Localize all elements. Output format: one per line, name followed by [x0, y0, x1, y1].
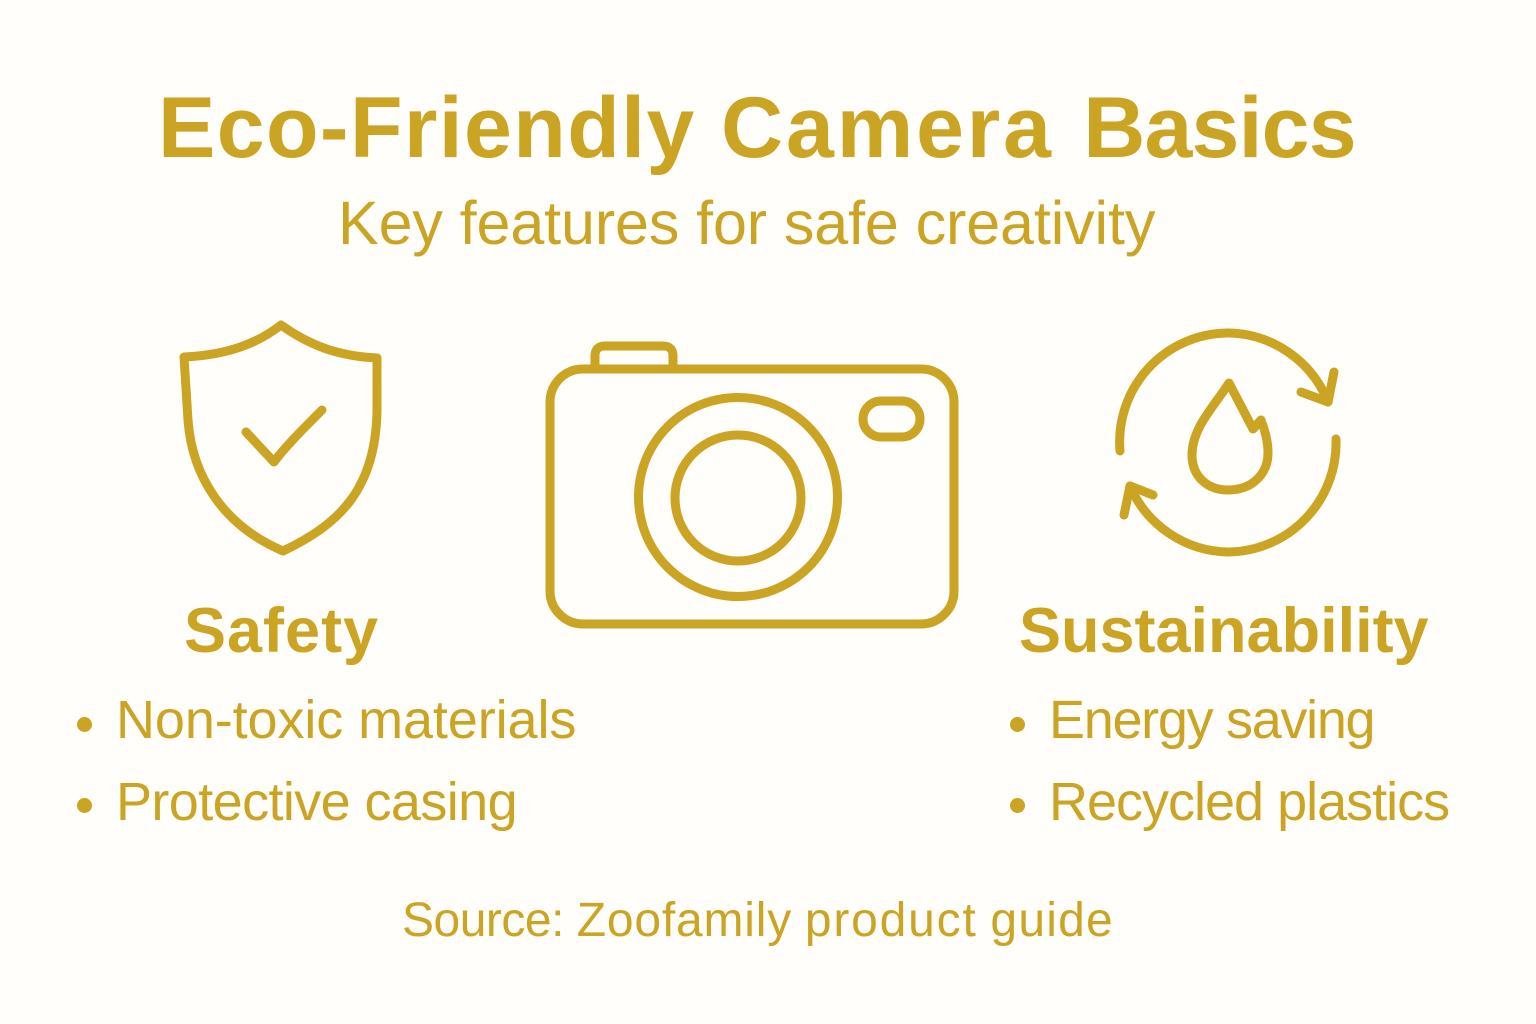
heading: safety: Safety: [184, 596, 379, 666]
bullet marker: [1010, 798, 1025, 813]
bullet: non-toxic materials: Non-toxic materials: [116, 690, 576, 750]
icon: shield: [180, 320, 382, 556]
heading: sustainability: Sustainability: [1019, 596, 1429, 666]
subtitle: Key features for safe creativity: [338, 189, 1155, 257]
bullet marker: [77, 717, 92, 732]
icon: camera: [546, 342, 958, 628]
bullet: protective casing: Protective casing: [116, 772, 517, 832]
bullet: recycled plastics: Recycled plastics: [1049, 772, 1449, 832]
icon: recycling water drop: [1115, 328, 1341, 556]
bullet marker: [77, 798, 92, 813]
bullet: energy saving: Energy saving: [1049, 690, 1374, 750]
bullet marker: [1010, 717, 1025, 732]
source: Source: Zoofamily product guide: [402, 894, 1114, 947]
title: Eco-Friendly Camera Basics: [158, 80, 1356, 176]
